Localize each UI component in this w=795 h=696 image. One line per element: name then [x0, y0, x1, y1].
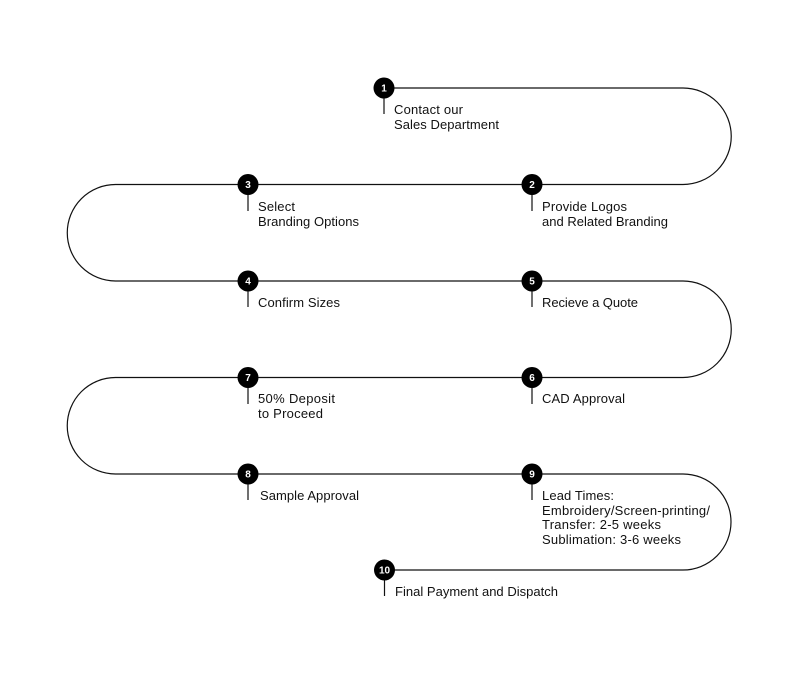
step 3 [238, 174, 360, 229]
step 9: 9 [529, 470, 535, 480]
step 7: 50% Deposit [258, 391, 335, 406]
step 9: Transfer: 2-5 weeks [542, 517, 662, 532]
step 1 [374, 78, 499, 132]
step 8: Sample Approval [260, 488, 359, 503]
step 5: Recieve a Quote [542, 295, 638, 310]
step 7: 7 [245, 373, 251, 384]
step 1: 1 [381, 84, 387, 94]
step 10 [374, 560, 558, 599]
step 6 [522, 367, 625, 406]
step 4: Confirm Sizes [258, 295, 340, 310]
step 9: Sublimation: 3-6 weeks [542, 532, 682, 547]
step 9: Embroidery/Screen-printing/ [542, 503, 710, 518]
step 6: CAD Approval [542, 391, 625, 406]
step 2: and Related Branding [542, 214, 668, 229]
step 9: Lead Times: [542, 488, 614, 503]
step 8: 8 [245, 470, 251, 480]
serpentine path [67, 88, 731, 570]
step 3: Branding Options [258, 214, 360, 229]
step 9 [522, 464, 710, 547]
step 5 [522, 270, 638, 310]
step 2: 2 [529, 180, 535, 191]
step 4: 4 [245, 276, 251, 288]
step 3: 3 [245, 180, 251, 191]
step 2: Provide Logos [542, 199, 628, 214]
step 2 [522, 174, 668, 229]
step 1: Contact our [394, 102, 464, 117]
step 1: Sales Department [394, 117, 499, 132]
step 8 [238, 464, 359, 503]
step 5: 5 [529, 276, 535, 288]
step 6: 6 [529, 373, 535, 384]
step 3: Select [258, 199, 295, 214]
step 10: Final Payment and Dispatch [395, 584, 558, 599]
step 7 [238, 367, 335, 421]
step 4 [238, 270, 340, 310]
step 7: to Proceed [258, 406, 323, 421]
step 10: 10 [379, 566, 390, 576]
